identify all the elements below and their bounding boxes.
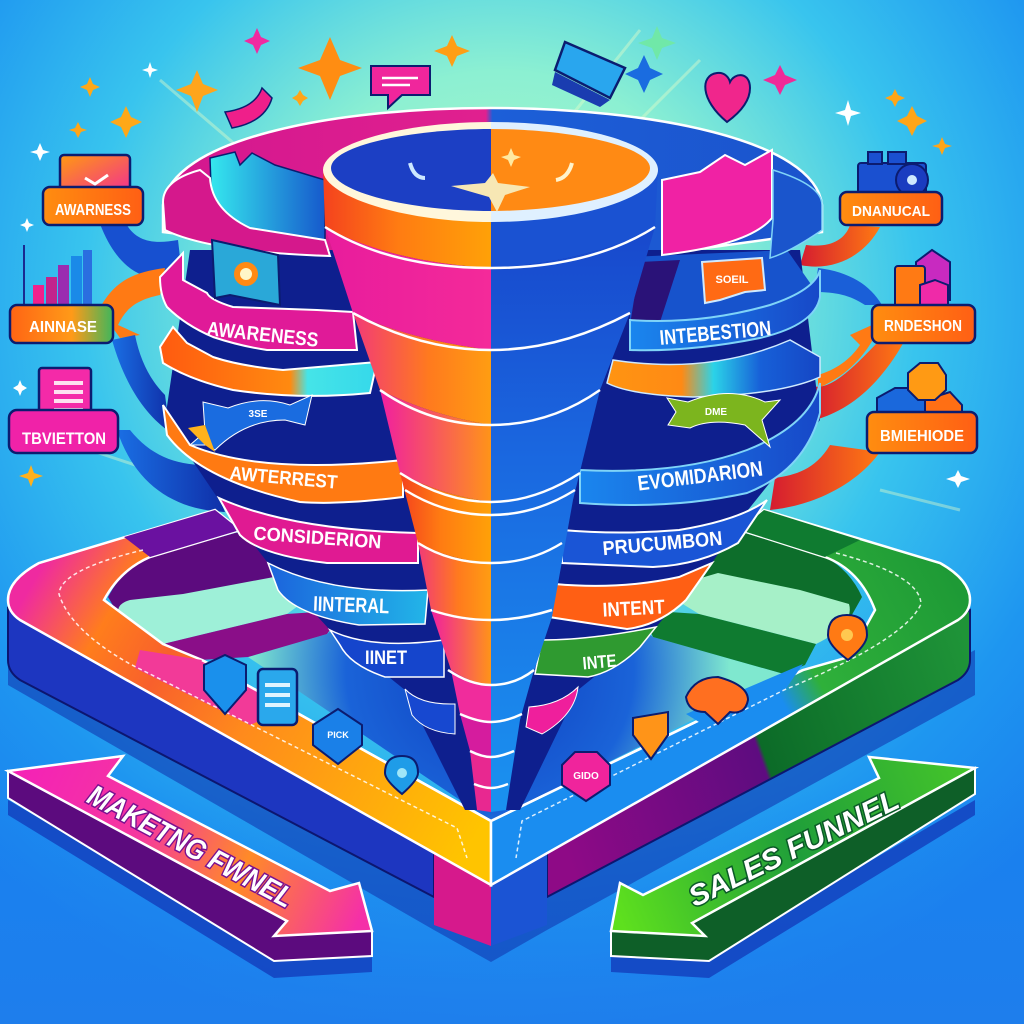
ribbon: consideration [219,498,418,563]
icon: small orange star [885,89,905,107]
icon: small orange star [292,90,308,106]
pins left [204,655,418,794]
icon: orange star [110,106,142,138]
ribbon: blue orange band [607,340,820,397]
icon: speech bubble [371,66,430,108]
back ring [163,108,822,255]
badge ribbon left [188,395,312,452]
ribbon: interest [630,270,820,350]
label: dnanucal with camera icon: DNANUCAL [852,203,930,220]
arrow text: SALES FUNNEL [684,784,904,914]
dark green right upper track [740,510,860,557]
pin: pink octagon: GIDO [573,771,599,782]
marketing funnel arrow [8,756,372,978]
icon: magenta star [244,28,270,54]
funnel rim [323,130,491,268]
ribbon texts: IINET [365,648,407,669]
icon: pink star [763,65,797,95]
icon: small orange star [69,122,87,138]
ribbon: blue side [770,170,822,258]
ribbon: magenta panel [662,150,772,255]
ribbon: evaluation [580,383,820,505]
inner wall right [650,520,862,620]
platform shadow [8,650,975,962]
icon: white sparkle [946,470,970,488]
pin: shield [204,655,246,714]
top icons [13,26,970,488]
ribbon: cyan panel [210,152,325,254]
ribbon texts: AWTERREST [229,463,339,494]
flow arrows left [100,222,225,512]
corner prong [434,841,547,946]
right wall [547,610,970,897]
label: tbvietton with document icon: TBVIETTON [22,429,106,448]
icon: white sparkle [30,143,50,161]
pins right [562,615,867,801]
ribbon: small blue [405,689,455,734]
label: tbvietton with document icon [9,368,118,453]
label: ainnase with bar chart: AINNASE [29,319,97,336]
ribbon texts: INTEBESTION [659,317,772,350]
icon: phone left [410,163,425,178]
icon: white sparkle [13,380,27,396]
label: awareness with icon: AWARNESS [55,202,131,219]
ribbon: awterrest [163,405,403,503]
ribbon texts: INTE [582,651,617,673]
ribbon: dark purple panel [630,260,680,325]
icon: blue star [625,55,663,93]
label: rndeshon with buildings icon: RNDESHON [884,318,962,335]
purple bar left [163,610,345,660]
inner wall left [108,520,330,624]
sparkle [501,148,521,167]
arrow text: MAKETNG FWNEL [82,779,298,915]
funnel cone right side [491,227,655,812]
ribbon texts: IINTERAL [313,593,390,618]
left track surface [8,510,491,885]
arrow wall [611,768,975,961]
ribbon: orange band [160,327,377,396]
ribbon: awareness [160,253,357,350]
purple left upper track [124,510,240,557]
ribbon: blue panel [630,250,815,330]
ribbon texts: INTENT [602,596,665,622]
funnel [323,122,658,812]
ribbon texts: EVOMIDARION [636,457,764,496]
sales funnel arrow [611,757,975,978]
pin: orange location [828,615,867,660]
icon: orange star [434,35,470,67]
label: bmiehiode with hexagon icons: BMIEHIODE [880,428,964,445]
pin: document [258,669,297,725]
label: bmiehiode with hexagon icons [867,363,977,453]
arrow top [8,756,372,936]
badge ribbon right: DME [705,407,727,418]
icon: orange star [176,70,218,112]
funnel dark interior [165,250,820,810]
icon: orange chat card: SOEIL [715,274,749,286]
icon: orange sparkle [932,137,952,155]
icon: orange star [897,106,927,136]
label: dnanucal with camera icon [840,152,942,225]
blue marker arrow [686,664,803,735]
icon: large orange star [298,37,362,100]
icon: orange chat card [702,258,765,303]
label: ainnase with bar chart [10,245,113,343]
pin: pink octagon [562,752,610,801]
ribbon: intent [549,563,712,629]
icon: sun card [212,240,280,305]
pink track section [135,650,290,725]
icon: laptop [552,42,625,107]
pin: orange shield [633,712,668,759]
badge ribbon right [667,394,780,447]
mint hole left [118,577,320,644]
icon: white sparkle [142,62,158,78]
inner edge line [202,660,803,821]
pin: location [385,756,418,794]
ribbon texts [206,317,772,673]
ribbon: inet [330,630,444,677]
icon: orange sparkle [19,465,43,487]
icon: swoosh [225,88,272,128]
icon: white sparkle [835,100,861,126]
badge ribbon left: 3SE [249,409,268,420]
platform: funnel base track [8,500,975,962]
inner floor [248,500,784,821]
arrow shadow [611,800,975,978]
ribbon texts: AWARENESS [206,318,319,352]
arrow wall [8,771,372,961]
pin: hexagon: PICK [327,730,349,740]
funnel segment lines [353,313,630,788]
ribbon: purchase [562,500,767,567]
left wall [8,608,434,897]
green bar right [640,610,816,674]
icon: heart [705,73,750,122]
ribbons right [526,150,822,734]
icon: green star [638,26,676,60]
opening star [451,173,530,212]
arrow top [611,757,975,936]
ribbon: small pink [526,687,578,734]
ribbon: interal [268,563,428,625]
funnel opening [323,122,491,222]
ribbon: inte [535,627,656,677]
funnel cone left segments [325,227,491,350]
arrow shadow [8,800,372,978]
pin: hexagon [313,709,362,764]
icon: phone right [556,163,572,180]
icon: white sparkle [20,218,34,232]
pin: orange cloud [686,677,748,724]
ribbon texts: PRUCUMBON [602,528,723,560]
flow arrows right [770,225,905,510]
ribbons left [160,152,455,734]
ribbon texts: CONSIDERION [253,524,382,553]
icon: small orange star [80,77,100,97]
label: awareness with icon [43,155,143,225]
mint hole right [660,573,850,644]
right track surface [491,510,970,885]
ribbon: magenta top [163,170,330,256]
label: rndeshon with buildings icon [872,250,975,343]
dashed route lines [59,550,921,858]
